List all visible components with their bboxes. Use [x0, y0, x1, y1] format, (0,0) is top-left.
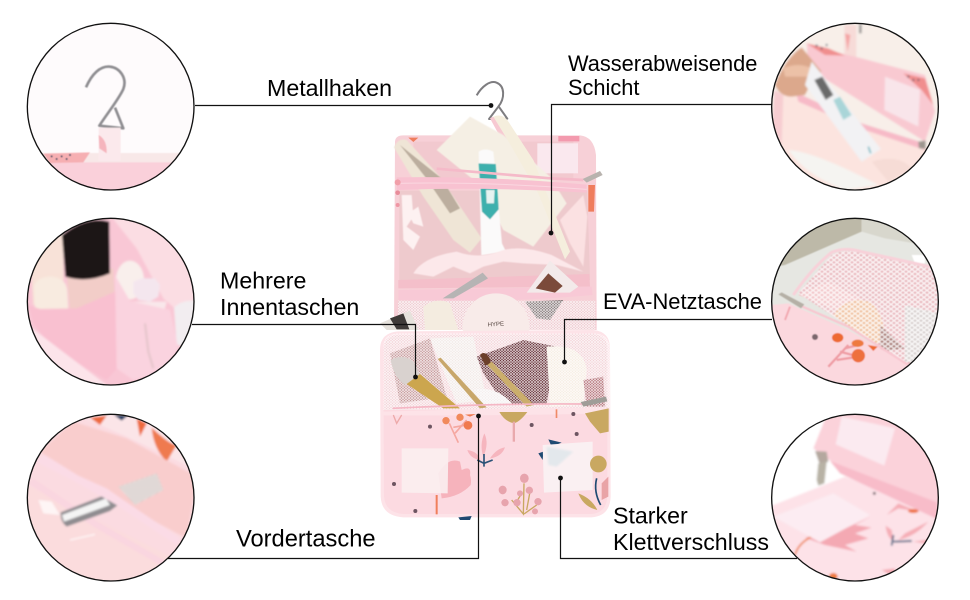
under flap print: [887, 503, 918, 515]
clear pocket: [781, 96, 924, 188]
photo circle: inner pockets: [26, 218, 195, 386]
leader: Starker Klettverschluss: [558, 476, 797, 558]
right velcro patch: [538, 439, 593, 493]
upper band: [52, 460, 150, 519]
zipper pull: [581, 397, 607, 407]
left dots: [395, 179, 401, 185]
hand: [775, 47, 822, 97]
velcro strip top: [537, 143, 578, 173]
inner lower bands: [398, 274, 590, 288]
zipper pull: [815, 451, 828, 486]
towel: [437, 117, 567, 247]
photo circle: EVA mesh pocket: [771, 218, 939, 386]
loop: [844, 25, 856, 60]
round powder puff: [463, 293, 529, 360]
black bottle: [62, 220, 115, 310]
label: Mehrere Innentaschen: Mehrere: [220, 268, 306, 294]
label: Vordertasche: Vordertasche: [236, 526, 376, 552]
lower band: [28, 478, 167, 565]
printed edge accents: [408, 138, 595, 212]
upper flap: [813, 408, 945, 519]
leader: Vordertasche: [168, 414, 481, 558]
zipper edge of front pocket: [383, 407, 609, 415]
mesh pocket contents: [384, 334, 607, 410]
hook: [86, 67, 124, 128]
leader: Wasserabweisende Schicht: [549, 104, 772, 235]
label: Wasserabweisende Schicht: Schicht: [568, 75, 639, 100]
leader: Mehrere Innentaschen: [192, 324, 418, 379]
makeup brush 1: [391, 357, 460, 408]
background fabric: [765, 477, 945, 592]
printed pouch front: [772, 304, 907, 384]
panel rim: [793, 249, 945, 295]
bottle tops: [423, 301, 458, 330]
leader: EVA-Netztasche: [562, 320, 772, 364]
makeup brush 2: [438, 358, 487, 408]
small accents: [393, 415, 402, 423]
long handle comb: [493, 116, 570, 259]
print accents: [807, 43, 933, 105]
label: EVA-Netztasche: EVA-Netztasche: [603, 289, 762, 314]
velcro patch: [773, 493, 870, 542]
label: Metallhaken: Metallhaken: [267, 75, 392, 101]
back panel: [394, 135, 597, 330]
pink flower: [805, 517, 872, 552]
mesh overlay: [380, 330, 613, 410]
printed fabric: [88, 415, 186, 464]
mascara: [443, 273, 488, 298]
white jar: [173, 301, 194, 346]
toothpaste tube: [479, 149, 506, 255]
mesh panel: [798, 251, 945, 368]
pocket top zip band: [397, 177, 587, 193]
flower: gold fan: [499, 412, 527, 442]
zipper pull: [583, 171, 603, 183]
bag back panel: [807, 43, 935, 142]
front section: mesh pocket and printed pouch: [380, 330, 613, 520]
left edge: [772, 90, 783, 145]
white egg bottle: [116, 261, 144, 299]
label: Starker Klettverschluss: Starker: [613, 502, 688, 528]
leader: Metallhaken: [195, 103, 493, 108]
mascara mesh head: [118, 473, 163, 505]
lower mesh pocket: [398, 301, 595, 330]
pouch body: [380, 330, 611, 517]
photo circle: strong velcro closure: [765, 405, 952, 592]
comb: [394, 139, 482, 253]
hanging loop: [98, 126, 122, 153]
grey background: [780, 219, 862, 266]
eyeshadow compact: [527, 261, 578, 293]
pocket reflections: [402, 195, 587, 277]
label: Starker Klettverschluss: Klettverschluss: [613, 529, 769, 555]
photo circle: metal hook detail: [26, 22, 195, 191]
flower: navy sprig with pink leaves: [467, 433, 505, 467]
left pocket: [33, 293, 115, 312]
sample tube: [805, 62, 881, 162]
orange flower: [828, 333, 878, 367]
metal hook: [477, 82, 507, 119]
label: Mehrere Innentaschen: Innentaschen: [220, 294, 359, 320]
mesh pocket: [40, 422, 197, 538]
powder jar: [34, 277, 68, 310]
label: Wasserabweisende Schicht: Wasserabweisende: [568, 51, 757, 76]
flower: orange berries: [442, 414, 476, 443]
silver tube: [61, 495, 120, 527]
flower: pink berry sprig: [499, 474, 542, 514]
clear vinyl pocket: [23, 485, 180, 582]
flower: gold right side: [578, 408, 609, 510]
bag edge fabric: [50, 162, 172, 190]
octagon cap bottle: [136, 278, 167, 309]
small sprig: [886, 522, 933, 546]
puff label: HYPE: [488, 321, 504, 329]
photo circle: water-repellent layer: [771, 22, 939, 191]
polka dots: [392, 412, 579, 513]
zip band: [797, 95, 925, 150]
photo circle: front pocket detail: [26, 414, 195, 582]
zipper pull: [778, 292, 804, 308]
hanging loop: [490, 117, 517, 137]
upper fabric: [114, 219, 194, 307]
flower: large pink palm with velcro: [402, 448, 471, 514]
beauty sponge: [833, 300, 885, 345]
right pocket: [115, 275, 178, 380]
makeup brush 3: [480, 353, 534, 407]
panel: hanging travel bag photo: [380, 82, 613, 520]
clear vinyl pocket base: [399, 191, 590, 280]
top section: open upper compartment: [380, 81, 602, 331]
